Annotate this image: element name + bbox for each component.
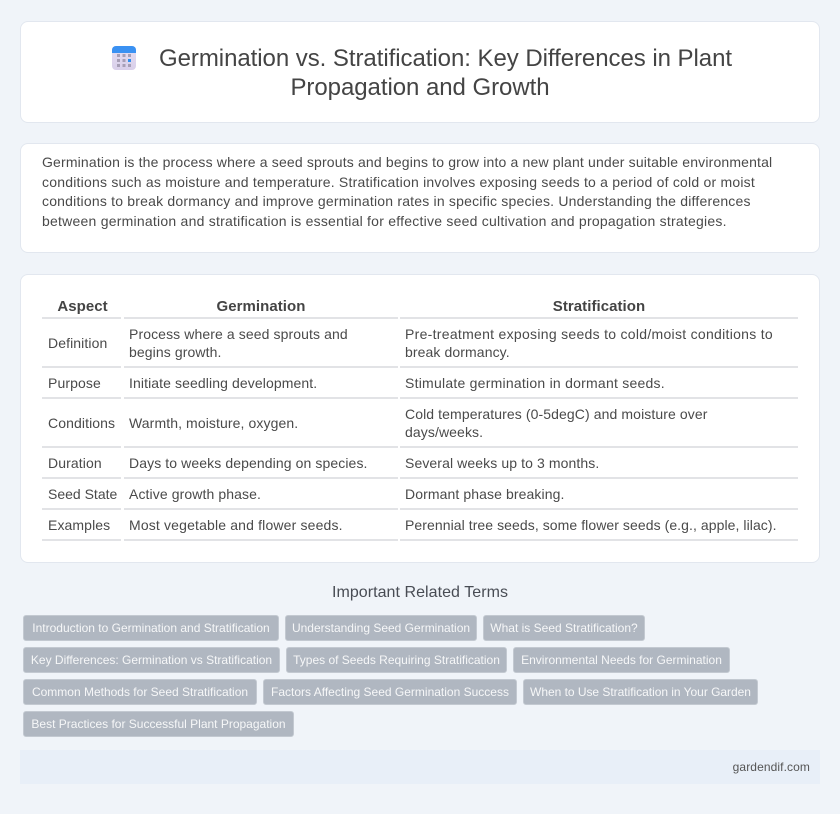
text block: introduction [42, 154, 772, 229]
table rows [42, 317, 798, 541]
table rows: begins growth. [129, 344, 221, 360]
table rows: Examples [48, 517, 110, 533]
title [159, 45, 732, 101]
table rows: Stimulate germination in dormant seeds. [405, 375, 665, 391]
footer credit: gardendif.com [733, 760, 810, 774]
related term tags: Common Methods for Seed Stratification [32, 685, 248, 699]
table rows: Initiate seedling development. [129, 375, 317, 391]
table rows: Pre-treatment exposing seeds to cold/moist conditions to [405, 326, 773, 342]
table rows: Definition [48, 335, 107, 351]
title: Germination vs. Stratification: Key Differences in Plant [159, 45, 732, 72]
related term tags: Understanding Seed Germination [292, 621, 470, 635]
table header [57, 298, 645, 315]
panel: introduction [20, 143, 820, 253]
table rows: Warmth, moisture, oxygen. [129, 415, 298, 431]
table rows: Conditions [48, 415, 115, 431]
table rows: Purpose [48, 375, 101, 391]
related term tags [23, 615, 758, 737]
table rows: Process where a seed sprouts and [129, 326, 348, 342]
table rows: days/weeks. [405, 424, 483, 440]
related term tags: Introduction to Germination and Stratification [32, 621, 270, 635]
table rows: Duration [48, 455, 102, 471]
related term tags: Factors Affecting Seed Germination Success [271, 685, 509, 699]
related term tags: Environmental Needs for Germination [521, 653, 722, 667]
related term tags: Types of Seeds Requiring Stratification [293, 653, 500, 667]
related term tags: Best Practices for Successful Plant Propagation [31, 717, 286, 731]
table rows: Active growth phase. [129, 486, 261, 502]
table header: Germination [217, 298, 305, 315]
heading: related terms: Important Related Terms [332, 584, 508, 601]
text block: introduction: conditions to break dormancy and improve germination rates in specific species. Understanding the differences [42, 193, 751, 209]
table rows: Several weeks up to 3 months. [405, 455, 599, 471]
table header: Stratification [553, 298, 645, 315]
text block: introduction: conditions such as moisture and temperature. Stratification involves exposing seeds to a period of cold or moist [42, 174, 755, 190]
table rows: break dormancy. [405, 344, 510, 360]
related term tags: What is Seed Stratification? [490, 621, 638, 635]
text block: introduction: between germination and stratification is essential for effective seed cultivation and propagation strategies. [42, 213, 727, 229]
table rows: Most vegetable and flower seeds. [129, 517, 343, 533]
title: Propagation and Growth [290, 74, 550, 101]
table rows: Dormant phase breaking. [405, 486, 564, 502]
related term tags: Key Differences: Germination vs Stratification [31, 653, 272, 667]
table rows: Perennial tree seeds, some flower seeds (e.g., apple, lilac). [405, 517, 777, 533]
table rows: Cold temperatures (0-5degC) and moisture over [405, 406, 708, 422]
table rows: Days to weeks depending on species. [129, 455, 368, 471]
table header: Aspect [57, 298, 108, 315]
icon: calendar [112, 46, 136, 70]
text block: introduction: Germination is the process where a seed sprouts and begins to grow into a new plant under suitable environmental [42, 154, 772, 170]
panel: header [20, 21, 820, 123]
footer [20, 750, 820, 784]
related term tags: When to Use Stratification in Your Garden [530, 685, 751, 699]
panel: comparison table [20, 274, 820, 563]
table rows: Seed State [48, 486, 117, 502]
